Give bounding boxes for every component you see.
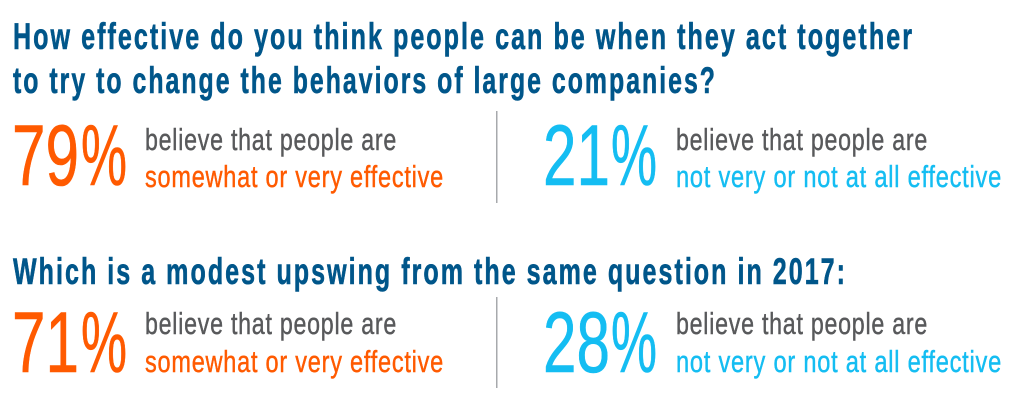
stat: 71% effective xyxy=(12,295,444,391)
stat: 21% not effective: % xyxy=(611,108,657,204)
stat: 28% not effective: believe that people are xyxy=(676,306,928,341)
stat: 28% not effective xyxy=(543,295,1002,391)
stat: 21% not effective: believe that people are xyxy=(676,122,928,157)
divider: bottom row xyxy=(496,297,498,388)
stat: 28% not effective: 28 xyxy=(543,295,610,391)
stat: 79% effective: believe that people are xyxy=(145,122,397,157)
stat: 21% not effective xyxy=(543,108,1002,204)
stat: 28% not effective: % xyxy=(611,295,657,391)
stat: 71% effective: 71 xyxy=(12,295,79,391)
divider: top row xyxy=(496,111,498,203)
stat: 79% effective: % xyxy=(81,108,127,204)
stat: 21% not effective: 21 xyxy=(543,108,610,204)
stat: 71% effective: % xyxy=(81,295,127,391)
stat: 79% effective: somewhat or very effective xyxy=(145,159,444,194)
heading: first question xyxy=(13,16,914,101)
stat: 79% effective xyxy=(12,108,444,204)
stat: 79% effective: 79 xyxy=(12,108,79,204)
stat: 71% effective: believe that people are xyxy=(145,306,397,341)
stat: 71% effective: somewhat or very effective xyxy=(145,344,444,379)
